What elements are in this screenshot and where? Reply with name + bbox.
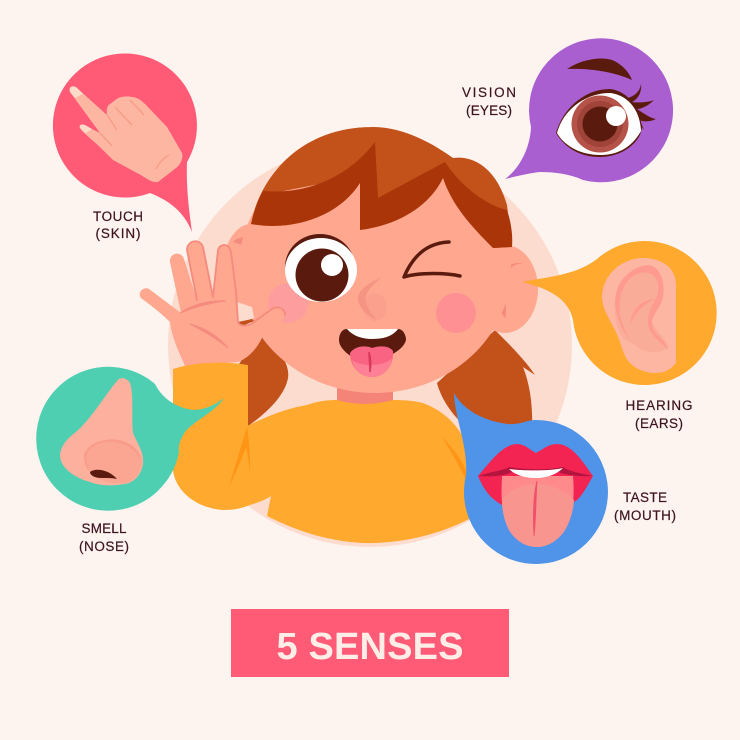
label: smell: SMELL <box>82 521 127 536</box>
icon: ear <box>602 258 676 373</box>
label: taste: TASTE <box>623 490 667 505</box>
label: smell <box>79 521 129 554</box>
pigtails <box>235 330 535 432</box>
bubble: smell <box>36 367 224 511</box>
label: touch: (SKIN) <box>96 226 140 241</box>
icon: eye <box>556 58 656 157</box>
label: hearing: (EARS) <box>635 416 683 431</box>
icon: nose <box>60 378 143 485</box>
label: touch: TOUCH <box>93 209 143 224</box>
title banner: 5 SENSES <box>276 626 464 668</box>
hand <box>140 241 285 366</box>
label: vision: VISION <box>462 85 516 100</box>
label: smell: (NOSE) <box>79 539 129 554</box>
neck <box>337 385 393 405</box>
bubble: taste <box>454 393 608 564</box>
sweater fold right <box>442 437 466 480</box>
gap between hand and ear <box>234 301 254 327</box>
bubble: hearing <box>522 241 717 385</box>
nose <box>358 277 387 321</box>
mouth <box>339 329 406 377</box>
winking eye <box>404 242 460 277</box>
cheeks <box>268 283 476 333</box>
label: vision <box>462 85 516 118</box>
bubble: vision <box>505 38 673 182</box>
sleeve fold <box>229 427 250 487</box>
sweater body <box>240 400 475 543</box>
title banner <box>231 609 509 677</box>
left sleeve <box>173 363 271 510</box>
background circle <box>168 143 572 547</box>
label: touch <box>93 209 143 241</box>
icon: mouth <box>478 444 593 547</box>
bubble: touch <box>53 54 197 232</box>
left eye <box>285 234 357 302</box>
icon: touching hand <box>70 86 182 182</box>
label: hearing: HEARING <box>626 398 692 413</box>
label: vision: (EYES) <box>466 103 512 118</box>
face <box>239 143 511 393</box>
ears <box>222 224 538 333</box>
label: taste <box>614 490 676 523</box>
label: hearing <box>626 398 692 431</box>
character: child <box>140 127 538 543</box>
hair <box>251 127 512 248</box>
label: taste: (MOUTH) <box>614 508 676 523</box>
